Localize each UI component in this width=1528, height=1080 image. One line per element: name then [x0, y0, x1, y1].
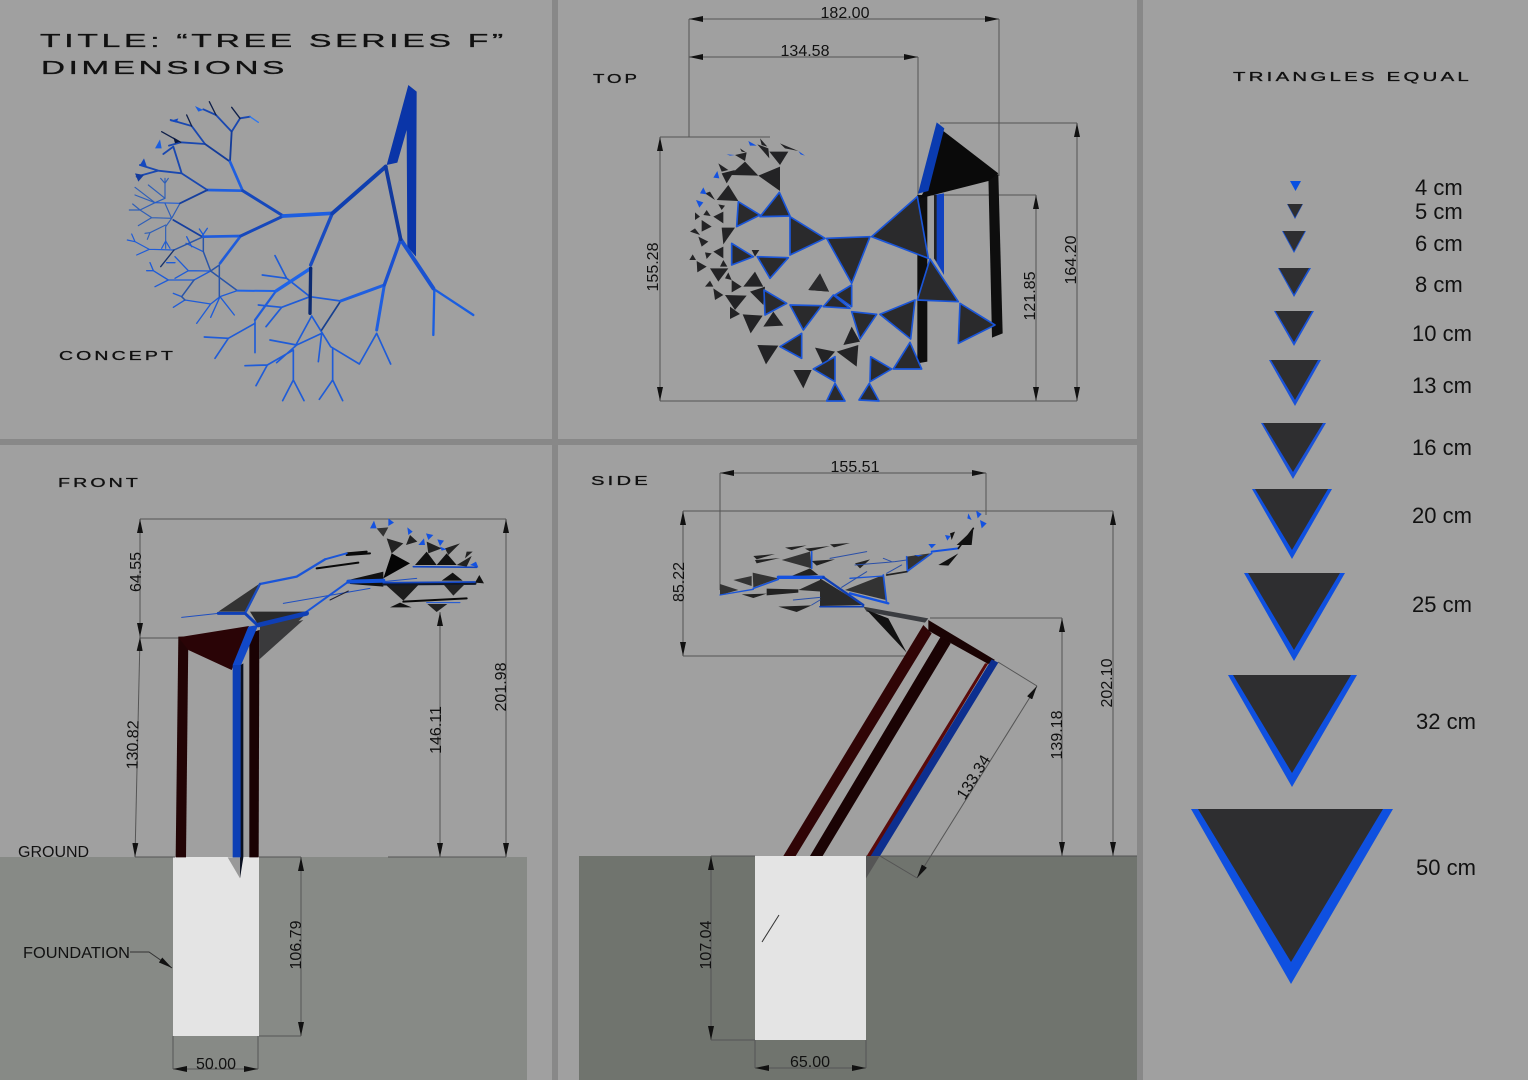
- triangle 8 cm: 8 cm: [1415, 272, 1463, 297]
- triangle 50 cm: [1191, 809, 1476, 984]
- dimension lines: side: 139.18: [1049, 710, 1066, 759]
- triangle 10 cm: 10 cm: [1412, 321, 1472, 346]
- dimension lines: side: 65.00: [790, 1054, 830, 1071]
- label: foundation: FOUNDATION: [23, 945, 130, 962]
- triangle 8 cm: [1278, 268, 1463, 297]
- dimension lines: front: 50.00: [196, 1056, 236, 1073]
- title: TITLE: “TREE SERIES F”: [40, 31, 507, 51]
- ground: side: [579, 856, 1137, 1080]
- dimension lines: top: 134.58: [781, 43, 830, 60]
- dimension lines: side: 133.34: [954, 752, 994, 803]
- triangle 25 cm: [1244, 573, 1472, 661]
- front frame: [176, 620, 303, 878]
- dimension lines: top: 121.85: [1022, 271, 1039, 320]
- dimension lines: top: 164.20: [1063, 235, 1080, 284]
- triangle 32 cm: 32 cm: [1416, 709, 1476, 734]
- dimension lines: front: 130.82: [124, 720, 143, 770]
- triangle 50 cm: 50 cm: [1416, 855, 1476, 880]
- triangle 10 cm: [1274, 311, 1472, 346]
- heading: triangles equal: TRIANGLES EQUAL: [1233, 70, 1472, 84]
- triangle 20 cm: [1252, 489, 1472, 559]
- panel: concept tree: [59, 85, 473, 401]
- triangle 6 cm: [1282, 231, 1463, 256]
- heading: concept: CONCEPT: [59, 349, 176, 363]
- triangle 13 cm: 13 cm: [1412, 373, 1472, 398]
- panel: triangles equal: [1191, 70, 1476, 984]
- dimension lines: top: 182.00: [821, 5, 870, 22]
- dimension lines: side: 107.04: [698, 920, 715, 969]
- panel: top view: [593, 5, 1080, 401]
- dimension lines: top: 155.28: [645, 242, 662, 291]
- foundation: front: [173, 857, 259, 1036]
- heading: top: TOP: [593, 72, 640, 86]
- dimension lines: top: [645, 5, 1080, 401]
- label: ground: GROUND: [18, 844, 89, 861]
- concept tree drawing: [127, 85, 473, 401]
- triangle 5 cm: 5 cm: [1415, 199, 1463, 224]
- dimension lines: front: 201.98: [493, 662, 510, 711]
- title: DIMENSIONS: [41, 58, 288, 78]
- side tree canopy: [720, 511, 987, 612]
- triangle 13 cm: [1269, 360, 1472, 406]
- title: [40, 31, 507, 78]
- triangle 32 cm: [1228, 675, 1476, 787]
- dimension lines: side: 85.22: [671, 562, 688, 602]
- dimension lines: front: 64.55: [128, 552, 145, 592]
- triangle 25 cm: 25 cm: [1412, 592, 1472, 617]
- heading: front: FRONT: [58, 476, 141, 490]
- triangle 4 cm: [1290, 175, 1463, 200]
- label: foundation: [23, 945, 172, 968]
- triangle 5 cm: [1287, 199, 1463, 224]
- panel: side view: [579, 459, 1137, 1080]
- ground: front: [0, 857, 527, 1080]
- side frame: [783, 607, 998, 878]
- heading: side: SIDE: [591, 474, 651, 488]
- dimension lines: side: [671, 459, 1137, 1071]
- top view drawing: [689, 122, 1003, 401]
- dimension lines: side: 155.51: [831, 459, 880, 476]
- triangle 6 cm: 6 cm: [1415, 231, 1463, 256]
- dimension lines: front: 106.79: [288, 920, 305, 969]
- front tree canopy: [182, 518, 484, 658]
- triangle 16 cm: 16 cm: [1412, 435, 1472, 460]
- triangle 20 cm: 20 cm: [1412, 503, 1472, 528]
- panel: front view: [0, 476, 527, 1080]
- dimension lines: front: 146.11: [428, 706, 445, 754]
- dimension lines: front: [124, 519, 510, 1073]
- foundation: side: [755, 856, 866, 1040]
- triangle 16 cm: [1261, 423, 1472, 479]
- dimension lines: side: 202.10: [1099, 658, 1116, 707]
- triangle 4 cm: 4 cm: [1415, 175, 1463, 200]
